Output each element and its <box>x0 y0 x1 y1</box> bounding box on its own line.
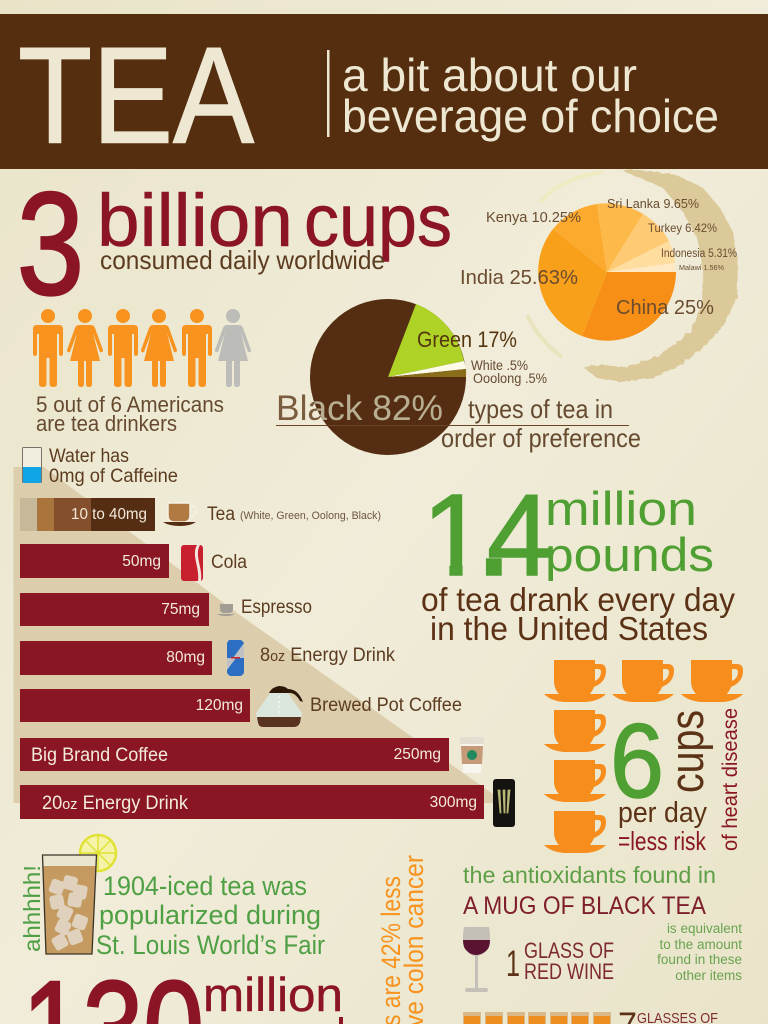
caption: consumed daily worldwide: consumed daily worldwide <box>100 245 385 275</box>
stat: 1 glass of red wine: RED WINE <box>524 959 614 984</box>
header divider <box>327 50 330 137</box>
icon: tea cup <box>163 503 196 526</box>
caption: tea drinkers <box>36 392 224 436</box>
vertical text: colon cancer <box>376 855 429 1024</box>
pictogram: 5 of 6 Americans <box>33 309 251 387</box>
pie chart: producing countries <box>460 196 737 341</box>
icon: coffee pot <box>256 686 303 727</box>
stat: 1.4 million pounds: . <box>473 439 515 607</box>
vertical text: colon cancer: s are 42% less <box>376 876 406 1024</box>
stat: 1.4 million pounds: pounds <box>545 528 714 581</box>
bar: brewed pot coffee <box>20 689 250 722</box>
icon: glass of water <box>22 448 42 483</box>
bar: cola: 50mg <box>122 553 161 570</box>
caption: tea drinkers: are tea drinkers <box>36 411 177 436</box>
rule under label <box>276 425 629 426</box>
icon: wine glass <box>463 927 490 992</box>
label: black: Black 82% <box>276 389 443 428</box>
title: TEA: TEA <box>18 20 255 172</box>
country labels: India 25.63% <box>460 266 578 289</box>
pie chart: types of tea: Black 82% <box>276 389 443 428</box>
country labels: China 25% <box>616 296 714 319</box>
coffee ring stain <box>527 170 738 382</box>
label: 8oz energy drink: 8oz Energy Drink <box>260 645 395 666</box>
stat: 1.4 million pounds <box>432 490 712 581</box>
bar: big brand coffee: Big Brand Coffee <box>31 745 168 766</box>
icon: energy drink can <box>227 640 244 676</box>
bar: big brand coffee: 250mg <box>394 746 441 763</box>
stat: 6 cups per day: cups <box>660 710 713 793</box>
heading: antioxidants: the antioxidants found in <box>463 862 716 888</box>
stat: 1 glass of red wine <box>506 938 614 984</box>
pie chart: types of tea <box>276 299 641 455</box>
stat: 1.4 million pounds: million <box>545 482 697 535</box>
stat: 130 million: million <box>203 968 343 1021</box>
note: equivalent amount: found in these <box>657 952 742 967</box>
bar: espresso: 75mg <box>161 601 200 618</box>
label: espresso: Espresso <box>241 597 312 618</box>
bar: espresso <box>20 593 209 626</box>
subtitle: a bit about our <box>342 49 637 101</box>
big number: 3 billion cups: cups <box>304 179 452 262</box>
text: iced tea history <box>96 871 325 960</box>
heading: a mug of black tea: A MUG OF BLACK TEA <box>463 892 706 920</box>
stat: 1.4 million pounds: 4 <box>487 470 552 600</box>
stat: 6 cups per day <box>610 703 742 856</box>
bar: 20oz energy drink: 300mg <box>430 794 477 811</box>
caption: tea drinkers: 5 out of 6 Americans <box>36 392 224 417</box>
caption: tea drank in the US: in the United States <box>430 610 708 647</box>
icon: paper coffee cup <box>460 737 484 773</box>
note: equivalent amount: to the amount <box>659 937 742 952</box>
bar: cola <box>20 544 169 578</box>
icon row: seven glasses <box>463 1012 611 1024</box>
label: tea: (White, Green, Oolong, Black) <box>240 510 381 522</box>
note: equivalent amount: is equivalent <box>667 921 742 936</box>
header band <box>0 14 768 172</box>
label: cola: Cola <box>211 552 247 573</box>
big number: 3 billion cups: 3 <box>17 162 84 325</box>
bar: 8oz energy drink: 80mg <box>166 649 205 666</box>
stat: 7 glasses of <box>618 1005 718 1024</box>
icon: cola can <box>181 545 203 581</box>
label: white: White .5% <box>471 357 528 373</box>
country labels: Sri Lanka 9.65% <box>607 196 699 211</box>
caffeine background triangle <box>14 467 505 803</box>
big number: 3 billion cups: billion <box>97 179 293 262</box>
icon: tall black can <box>493 779 515 827</box>
country labels: Turkey 6.42% <box>648 221 717 235</box>
stat: 1.4 million pounds: 1 <box>422 470 487 600</box>
bar: tea <box>20 498 155 531</box>
note: equivalent amount: other items <box>675 968 742 983</box>
stat: 6 cups per day: of heart disease <box>719 708 742 851</box>
stat: 1 glass of red wine: GLASS OF <box>524 938 614 963</box>
stat: 1 glass of red wine: 1 <box>506 943 520 984</box>
water caption <box>49 446 178 487</box>
country labels: Indonesia 5.31% <box>661 248 737 260</box>
caption: tea drank in the US: of tea drank every day <box>421 581 735 618</box>
icon row: six cups <box>544 660 743 853</box>
bar: 20oz energy drink <box>20 785 484 819</box>
label: brewed pot coffee: Brewed Pot Coffee <box>310 695 462 716</box>
stat: 6 cups per day: per day <box>618 797 707 829</box>
subtitle <box>342 49 719 142</box>
label: tea <box>207 504 381 525</box>
pie caption <box>441 394 641 453</box>
big number: 3 billion cups <box>17 162 452 325</box>
label: green: Green 17% <box>417 327 517 352</box>
country labels <box>460 196 737 319</box>
label: tea: Tea <box>207 504 235 525</box>
bar: big brand coffee <box>20 738 449 771</box>
caption: tea drank in the US <box>421 581 735 647</box>
text: iced tea history: popularized during <box>99 900 321 930</box>
label: oolong: Ooolong .5% <box>473 370 547 386</box>
water caption: Water has <box>49 446 129 467</box>
pie caption: types of tea in <box>468 394 613 424</box>
water caption: 0mg of Caffeine <box>49 466 178 487</box>
bar: brewed pot coffee: 120mg <box>196 697 243 714</box>
note: equivalent amount <box>657 921 742 983</box>
stat: 6 cups per day: =less risk <box>618 826 707 856</box>
pie caption: order of preference <box>441 423 641 453</box>
stat: 6 cups per day: 6 <box>610 703 664 820</box>
country labels: Malawi 1.56% <box>679 265 724 272</box>
subtitle: beverage of choice <box>342 90 719 142</box>
vertical text: colon cancer: ve colon cancer <box>399 855 429 1024</box>
exclamation: ahhhhh!: ahhhhh! <box>19 865 45 952</box>
bar: tea: 10 to 40mg <box>71 506 147 523</box>
icon: espresso cup <box>217 604 235 616</box>
stat: 130 million <box>32 976 343 1024</box>
icon: iced tea glass <box>42 835 116 954</box>
country labels: Kenya 10.25% <box>486 210 581 226</box>
text: iced tea history: St. Louis World’s Fair <box>96 930 325 960</box>
bar: 20oz energy drink: 20oz Energy Drink <box>42 793 188 814</box>
bar: 8oz energy drink <box>20 641 212 675</box>
text: iced tea history: 1904-iced tea was <box>103 871 307 901</box>
